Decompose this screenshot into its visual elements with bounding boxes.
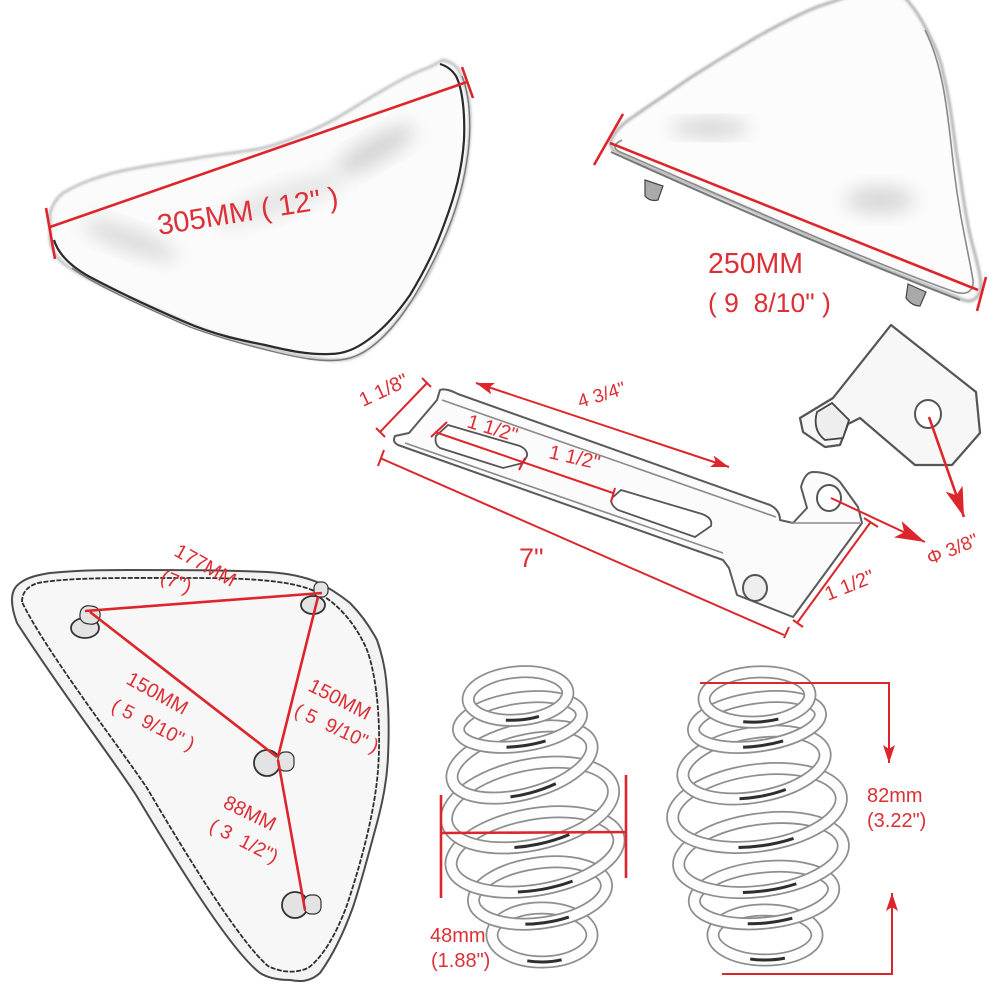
label: 250MM: 250MM [708,248,803,280]
bracket labels [356,370,982,606]
hole top [817,485,841,511]
underside labels: 150MM [123,668,192,720]
underside labels: (7") [157,566,195,598]
stud left [645,180,663,200]
spring labels: (3.22") [867,810,926,832]
spring labels: (1.88") [431,950,490,972]
dimension line: 250mm [594,114,986,311]
arrow to hole [929,417,964,517]
label: 305MM: 305MM ( 12" ) [155,182,341,242]
hole bottom [743,575,767,601]
spring left [439,668,625,962]
underside labels: 88MM [220,792,279,836]
label: 250MM: ( 9 8/10" ) [708,288,831,318]
stud right [906,284,926,306]
dimension line: 305mm [46,67,473,259]
underside labels: ( 3 1/2") [206,815,282,868]
bracket labels: 1 1/2" [465,411,520,447]
underside labels: 150MM [305,675,374,725]
slot 2 [611,490,711,537]
underside labels: ( 5 9/10" ) [291,700,382,758]
bracket strip [356,370,982,638]
spring dimensions [430,683,926,974]
measurement lines [85,593,322,910]
bracket labels: 1 1/2" [822,566,878,606]
underside labels: ( 5 9/10" ) [108,695,198,755]
dimension lines: bracket [376,378,925,638]
spring labels: 82mm [867,785,923,807]
spring labels [430,785,926,972]
seat: front view 9 8/10 inch [594,0,986,318]
bracket labels: Φ 3/8" [924,530,982,570]
spring right [668,669,848,960]
slot 1 [436,425,527,468]
underside labels: 177MM [171,540,240,592]
bracket plate [800,325,980,517]
bracket labels: 7" [519,543,544,573]
bracket labels: 1 1/2" [547,441,602,474]
studs [71,582,328,918]
bracket labels: 1 1/8" [356,370,412,412]
spring labels: 48mm [430,925,486,947]
bracket labels: 4 3/4" [575,378,628,413]
seat underside [12,540,389,981]
seat: top view 12 inch [46,60,473,361]
underside labels [108,540,382,868]
